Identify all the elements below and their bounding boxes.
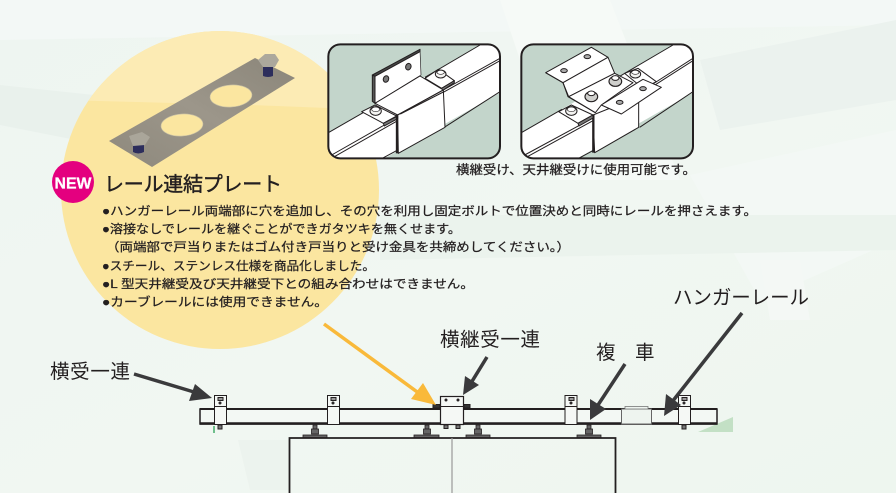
label: side receiver: 横受一連 — [50, 361, 130, 383]
arrow: wheel — [590, 364, 625, 420]
label: wheel: 複 車 — [596, 342, 655, 364]
arrow: side receiver — [134, 374, 212, 401]
diagram: side joint receiver — [328, 43, 502, 160]
feature list: ●ハンガーレール両端部に穴を追加し、その穴を利用し固定ボルトで位置決めと同時にレールを押さえます。 — [102, 203, 757, 218]
side receivers — [214, 396, 690, 429]
photo: rail connecting plate — [109, 54, 295, 167]
label: hanger rail: ハンガーレール — [673, 287, 809, 309]
arrow: yellow pointer — [324, 324, 436, 405]
feature list: ●スチール、ステンレス仕様を商品化しました。 — [102, 259, 375, 273]
arrow: hanger rail — [664, 313, 742, 416]
label: side joint receiver: 横継受一連 — [440, 329, 540, 351]
feature list: （両端部で戸当りまたはゴム付き戸当りと受け金具を共締めしてください。） — [106, 239, 570, 254]
feature list: ●カーブレールには使用できません。 — [102, 294, 328, 309]
arrow: side joint receiver — [463, 357, 487, 395]
door — [290, 438, 616, 493]
feature list: ●L 型天井継受及び天井継受下との組み合わせはできません。 — [102, 277, 474, 291]
NEW badge — [52, 161, 94, 203]
green accent — [698, 417, 733, 432]
side joint receiver on rail — [433, 396, 470, 428]
caption: 横継受け、天井継受けに使用可能です。 — [456, 162, 696, 177]
hanger rail — [200, 406, 717, 424]
hanger wheels — [303, 425, 601, 438]
heading: レール連結プレート — [104, 173, 282, 196]
yellow circle — [60, 30, 380, 349]
feature list — [102, 203, 757, 309]
diagram: ceiling joint receiver — [521, 43, 695, 160]
NEW badge: NEW — [54, 176, 92, 192]
feature list: ●溶接なしでレールを継ぐことができガタツキを無くせます。 — [102, 221, 461, 236]
